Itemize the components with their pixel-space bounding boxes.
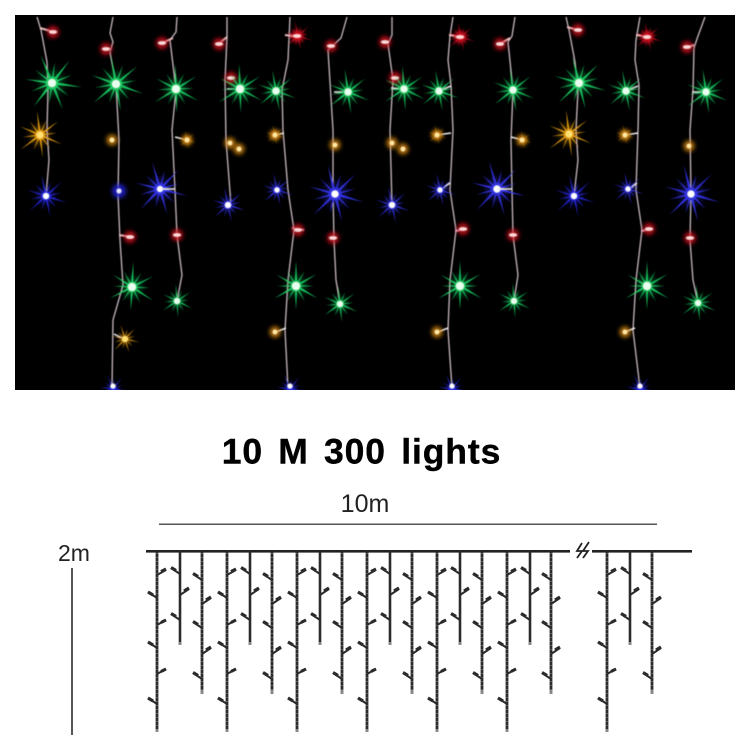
width label: 10m: 10m (341, 490, 389, 518)
hanging strands (148, 551, 661, 732)
panel: night photo of icicle lights (14, 15, 735, 403)
top cable right section (592, 550, 692, 553)
strand 11 (608, 16, 668, 390)
width dimension line (159, 524, 657, 525)
strand 6 (310, 16, 369, 322)
strand 2 (92, 16, 152, 390)
title: 10 M 300 lights (222, 432, 501, 472)
strand 4 (210, 16, 262, 222)
strand 10 (550, 16, 606, 216)
strand 8 (422, 16, 481, 390)
strand 5 (258, 16, 317, 390)
strand 3 (136, 16, 198, 316)
icon: cable break symbol (577, 542, 589, 558)
strand 1 (20, 16, 81, 216)
strand 9 (472, 16, 534, 318)
height dimension line (71, 568, 73, 735)
height label: 2m: 2m (58, 540, 90, 566)
strand 12 (666, 16, 727, 320)
top cable left section (146, 550, 570, 553)
diagram: string light layout (146, 542, 692, 732)
strand 7 (376, 16, 424, 222)
